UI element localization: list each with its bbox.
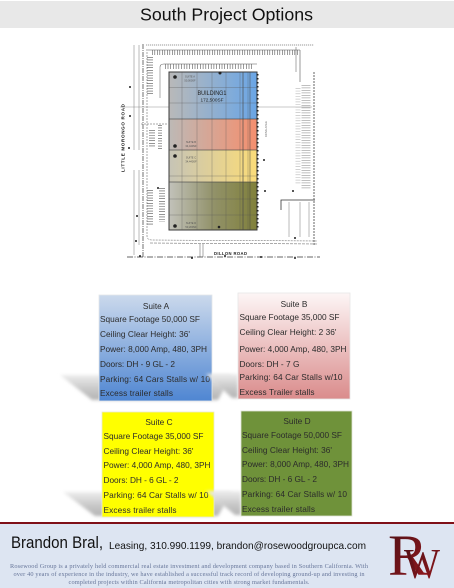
building label: BUILDING1	[198, 90, 227, 97]
panel: Suite D: Doors: DH - 6 GL - 2	[242, 474, 317, 484]
panel: Suite A: Ceiling Clear Height: 36'	[100, 329, 190, 339]
contact name: Brandon Bral,	[11, 533, 103, 552]
panel: Suite A: Doors: DH - 9 GL - 2	[100, 359, 175, 369]
company description	[10, 563, 369, 586]
shadow: Suite D	[206, 491, 241, 515]
panel: Suite C: Ceiling Clear Height: 36'	[104, 446, 194, 456]
site plan	[120, 44, 320, 259]
panel: Suite A: Power: 8,000 Amp, 480, 3PH	[100, 344, 207, 354]
panel: Suite A	[60, 295, 232, 401]
site markers	[128, 72, 296, 259]
title banner	[0, 1, 454, 28]
shadow: Suite B	[206, 374, 238, 398]
panel: Suite D: Power: 8,000 Amp, 480, 3PH	[242, 459, 349, 469]
suite labels	[184, 74, 197, 229]
panel: Suite A: Parking: 64 Cars Stalls w/ 10	[100, 374, 210, 384]
panel: Suite C: Parking: 64 Car Stalls w/ 10	[104, 490, 209, 500]
panel: Suite B: Suite B	[281, 299, 308, 309]
suite labels: 34,440SF	[185, 160, 197, 164]
shadow: Suite C	[63, 492, 232, 516]
panel: Suite B: Square Footage 35,000 SF	[240, 312, 340, 322]
suite labels: 53,200SF	[185, 225, 197, 229]
panel: Suite C: Doors: DH - 6 GL - 2	[104, 475, 179, 485]
drive aisle label: DRIVE AISLE	[264, 121, 268, 137]
panel: Suite A: Square Footage 50,000 SF	[100, 314, 200, 324]
panel: Suite C: Power: 4,000 Amp, 480, 3PH	[104, 460, 210, 470]
panel: Suite B	[206, 293, 350, 399]
company description: completed projects within California metropolitan cities with strong market fundamentals.	[68, 579, 310, 586]
road label: Dillon Road: DILLON ROAD	[214, 251, 247, 256]
panel: Suite A: Excess trailer stalls	[100, 388, 173, 398]
suite labels: SUITE D	[186, 221, 196, 225]
panel: Suite D: Suite D	[283, 416, 311, 426]
shadow: Suite A	[60, 375, 232, 400]
panel: Suite B: Doors: DH - 7 G	[240, 359, 300, 369]
panel: Suite C: Excess trailer stalls	[104, 505, 176, 515]
building colored suites	[169, 72, 258, 230]
panel: Suite D: Parking: 64 Car Stalls w/ 10	[242, 489, 347, 499]
panel: Suite C	[63, 412, 232, 517]
logo: RW: R	[388, 523, 428, 588]
panel: Suite D: Excess trailer stalls	[242, 504, 315, 514]
building label: 172,500SF	[200, 98, 224, 102]
suite labels: 50,000SF	[184, 78, 196, 82]
panel: Suite D: Square Footage 50,000 SF	[242, 430, 342, 440]
panel: Suite B: Ceiling Clear Height: 2 36'	[240, 327, 337, 337]
building label	[198, 90, 227, 102]
panel: Suite C: Suite C	[145, 417, 173, 427]
suite labels: SUITE B	[186, 140, 196, 144]
company description: Rosewood Group is a privately held commercial real estate investment and development company based in Southern California. With	[10, 563, 369, 570]
road label: Little Morongo Road: LITTLE MORONGO ROAD	[120, 103, 126, 172]
panel: Suite B: Power: 4,000 Amp, 480, 3PH	[240, 344, 346, 354]
panel: Suite D: Ceiling Clear Height: 36'	[242, 445, 332, 455]
panel: Suite B: Parking: 64 Car Stalls w/10	[240, 372, 343, 382]
contact details: Leasing, 310.990.1199, brandon@rosewoodgroupca.com	[109, 540, 366, 552]
parking stalls	[150, 52, 314, 245]
logo: RW: W	[404, 542, 440, 588]
suite labels: SUITE C	[186, 156, 196, 160]
panel: Suite A: Suite A	[143, 301, 170, 311]
footer	[0, 522, 454, 588]
property boundary and roads	[120, 44, 320, 258]
company description: over 40 years of experience in the industry, we have established a successful track record of developing ground-up and investing in	[14, 571, 365, 578]
panel: Suite D	[206, 411, 352, 516]
panel: Suite B: Excess Trailer stalls	[240, 387, 314, 397]
title banner: South Project Options	[140, 4, 313, 24]
suite labels: SUITE A	[185, 74, 195, 78]
suite labels: 34,440SF	[185, 144, 197, 148]
panel: Suite C: Square Footage 35,000 SF	[104, 431, 204, 441]
